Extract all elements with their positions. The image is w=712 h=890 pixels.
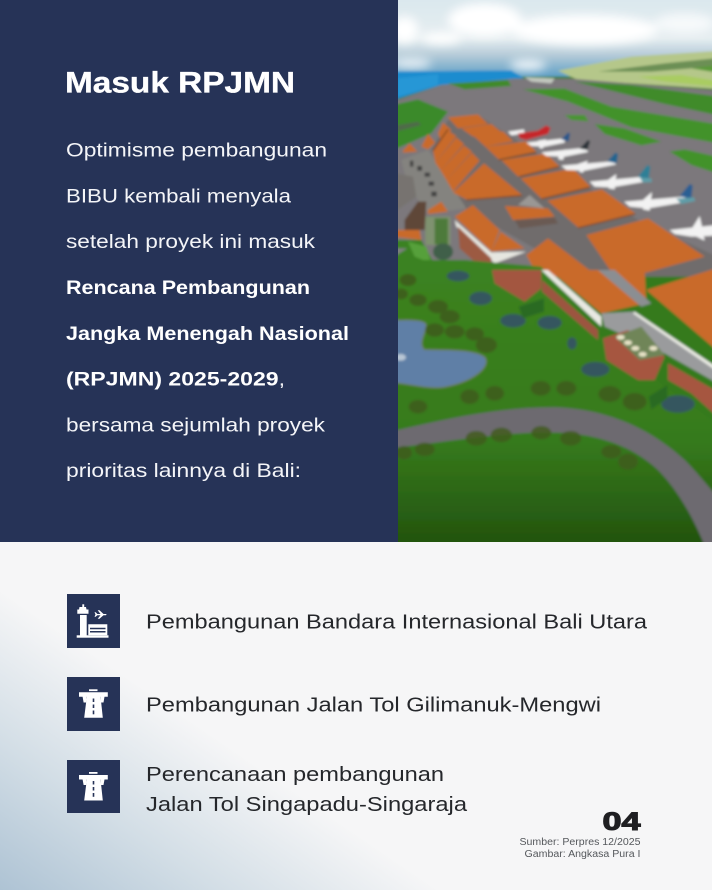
apron and runway (378, 77, 712, 270)
source credits (520, 837, 641, 860)
list item: Gilimanuk-Mengwi toll road (67, 677, 601, 731)
body paragraph: (RPJMN) 2025-2029 , (66, 369, 285, 391)
sky, sea and far land (378, 0, 712, 105)
source credits: Gambar: Angkasa Pura I (524, 849, 640, 860)
body paragraph: Rencana Pembangunan (66, 277, 310, 299)
panel: navy text panel (0, 0, 398, 542)
list text: Singapadu-Singaraja: Jalan Tol Singapadu-Singaraja (146, 793, 468, 816)
body paragraph: setelah proyek ini masuk (66, 231, 315, 253)
photo: aerial rendering of Bali Utara airport (398, 0, 712, 542)
parked aircraft (508, 125, 712, 241)
source credits: Sumber: Perpres 12/2025 (520, 837, 641, 848)
list text: airport: Pembangunan Bandara Internasional Bali Utara (146, 611, 648, 634)
list text: Singapadu-Singaraja: Perencanaan pembangunan (146, 763, 444, 786)
list item: Singapadu-Singaraja toll road (67, 760, 468, 816)
page number: 04 (602, 808, 641, 836)
icon: toll road (67, 760, 120, 813)
pond (398, 318, 489, 390)
body paragraph (66, 140, 349, 482)
body paragraph: bersama sejumlah proyek (66, 414, 325, 436)
body paragraph: Optimisme pembangunan (66, 140, 327, 162)
page background (0, 540, 712, 890)
body paragraph: BIBU kembali menyala (66, 185, 291, 207)
terminal roofs and building (378, 114, 712, 277)
body paragraph: prioritas lainnya di Bali: (66, 460, 301, 482)
road (398, 405, 712, 542)
icon: toll road (67, 677, 120, 731)
list text: Singapadu-Singaraja (146, 763, 468, 816)
icon: airport tower and terminal (67, 594, 120, 648)
body paragraph: Jangka Menengah Nasional (66, 323, 349, 345)
lawns, pond, road and trees (398, 258, 712, 542)
title: Masuk RPJMN (65, 66, 295, 100)
buildings lower (492, 270, 541, 302)
list text: Gilimanuk-Mengwi: Pembangunan Jalan Tol Gilimanuk-Mengwi (146, 693, 601, 716)
trees (395, 274, 647, 470)
list item: airport (67, 594, 648, 648)
